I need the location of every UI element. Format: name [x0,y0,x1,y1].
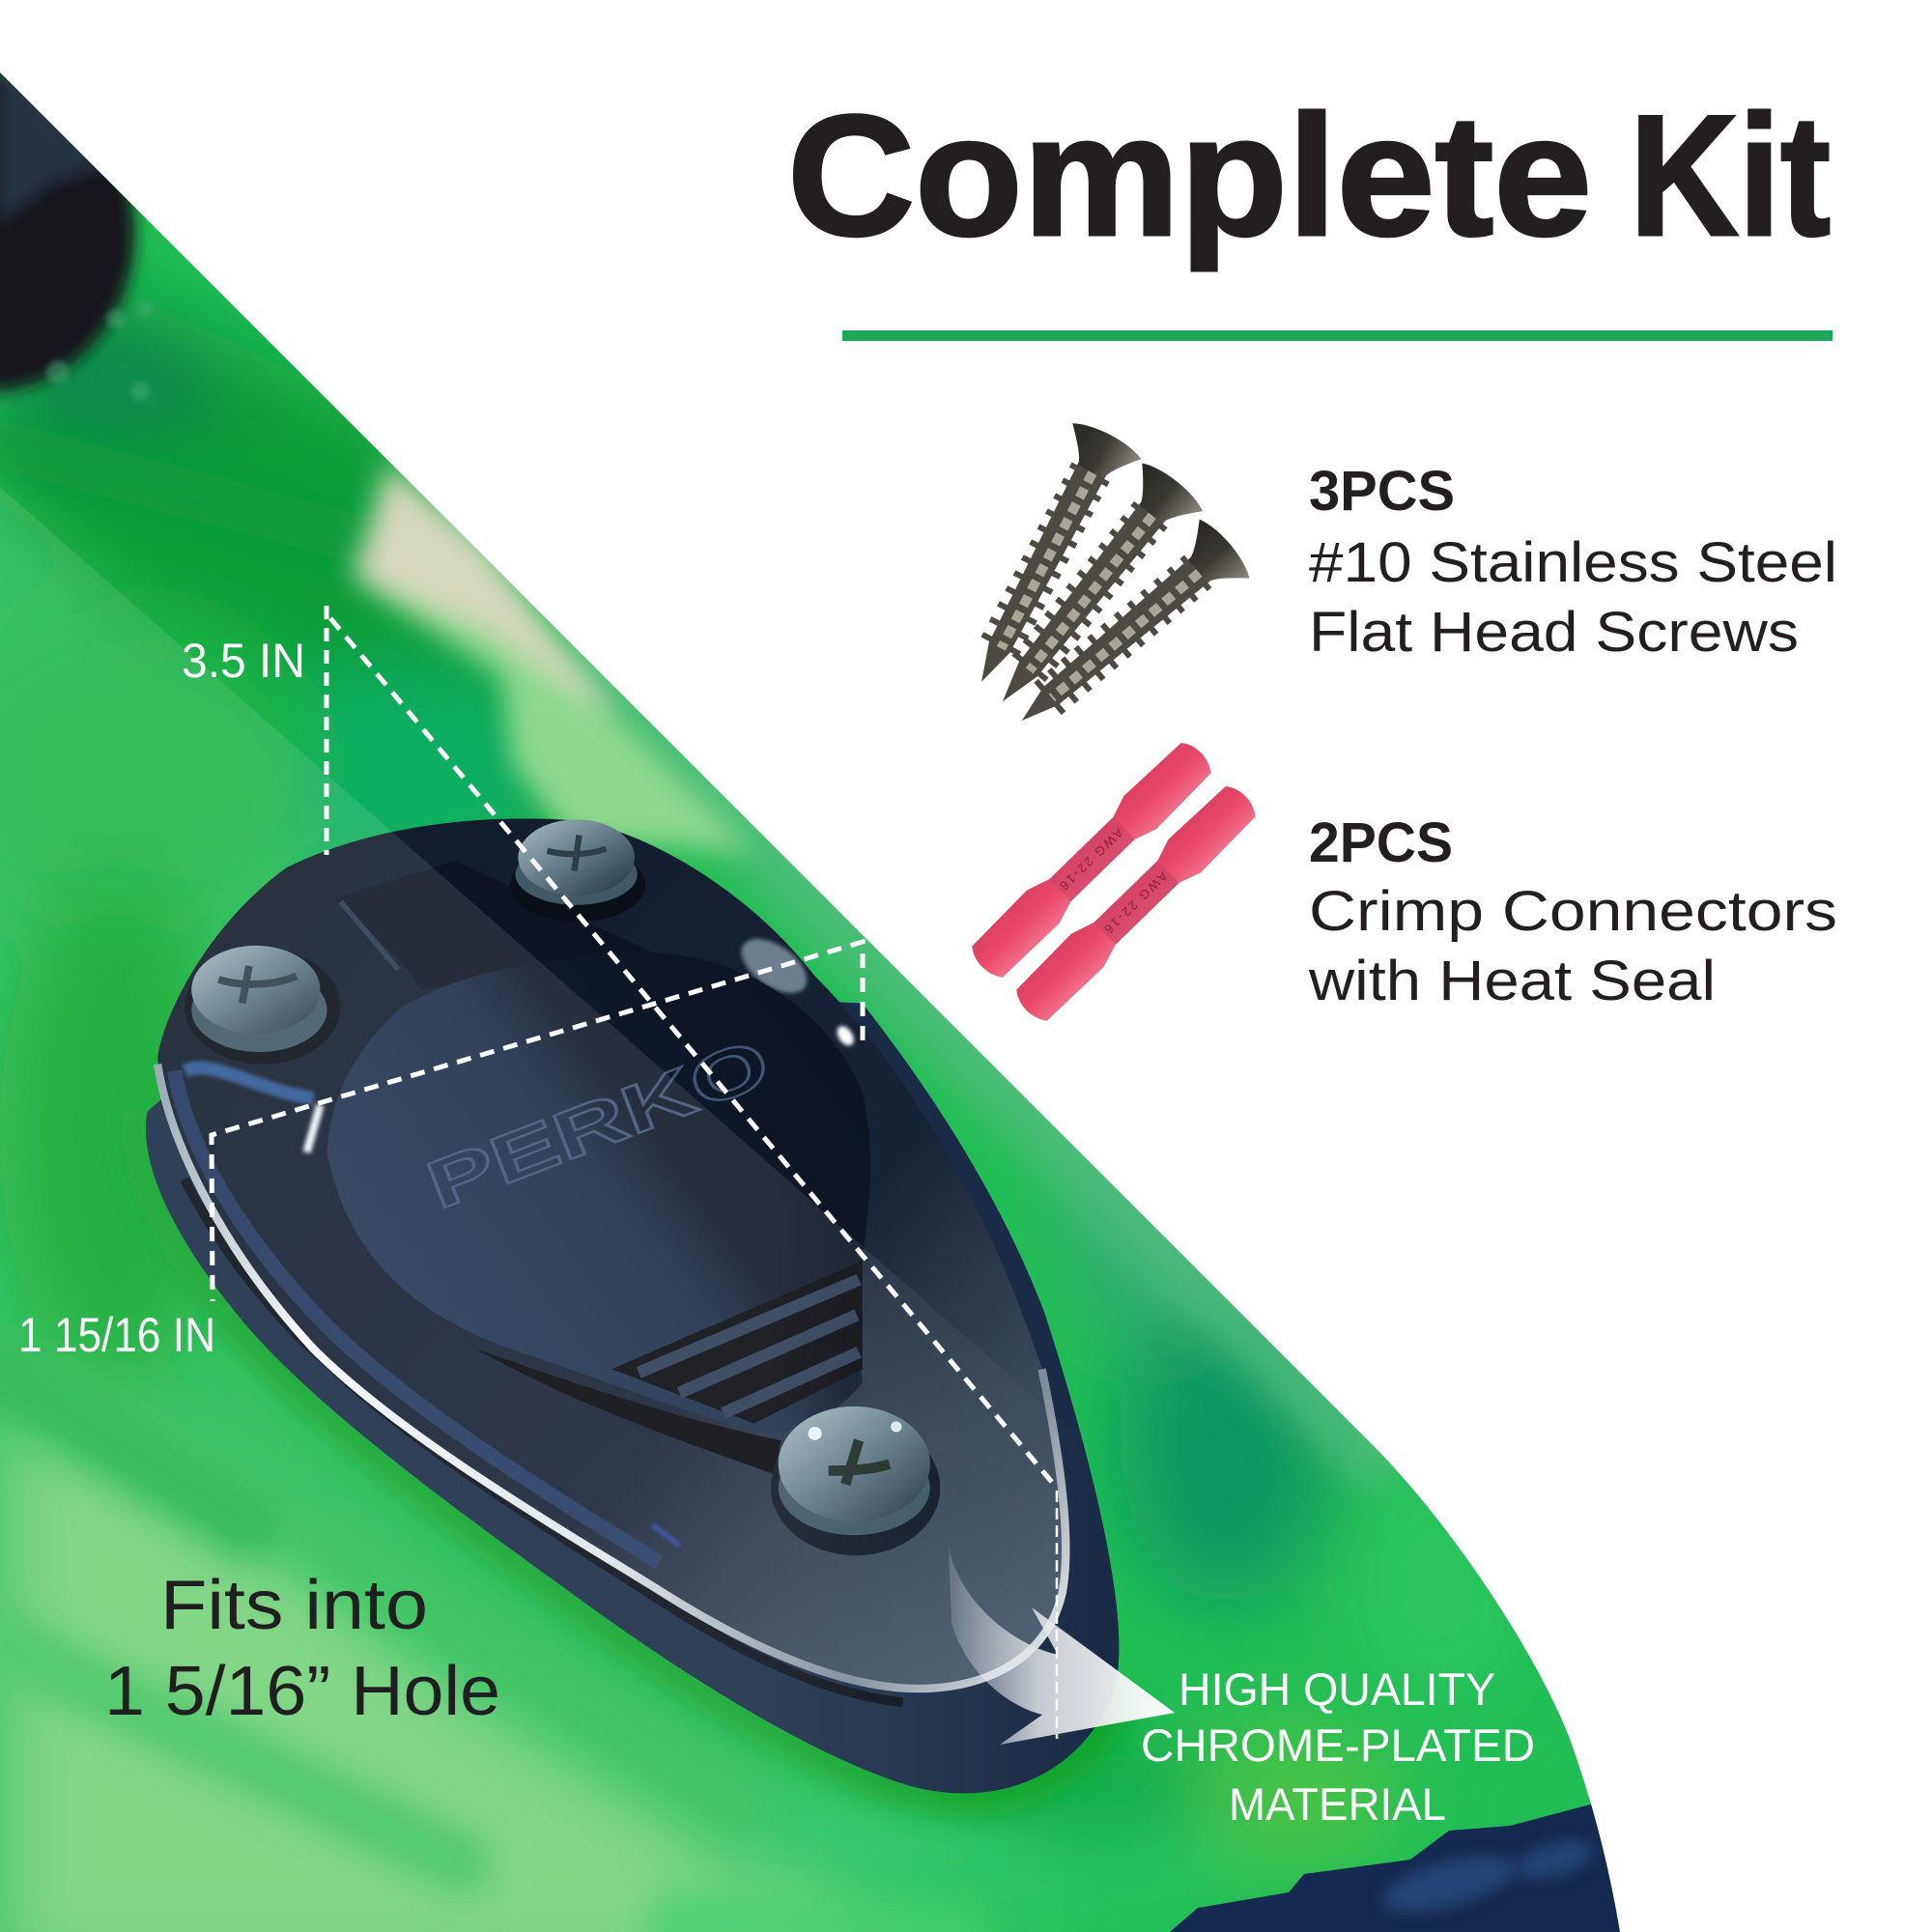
muted strip along the diagonal edge [599,676,1372,1444]
text block: screws: #10 Stainless Steel [1309,531,1837,594]
PERKO embossed logo: PERKO [416,1023,780,1223]
text: fits into hole [104,1567,500,1730]
mounting screw bottom [771,1406,940,1555]
text: fits into hole: 1 5/16” Hole [104,1653,500,1730]
hinge slot [334,861,652,989]
black shadow below cap [476,1349,781,1474]
rubber cap [327,952,870,1434]
connector 1: AWG 22-16 [1057,825,1126,893]
text block: connectors: Crimp Connectors [1309,880,1837,943]
screw 3 [997,515,1255,750]
connector mount [146,818,1119,1793]
blurred beige patch [351,464,753,850]
saturated halo around mount [174,1240,1138,1830]
text block: screws: 3PCS [1309,460,1455,523]
dark hose at bottom right [1170,1797,1642,1932]
chrome plate [157,818,1066,1689]
text: chrome-plated material callout: CHROME-PLATED [1141,1719,1535,1771]
text block: screws: Flat Head Screws [1309,601,1799,664]
mounting screw left [185,946,341,1065]
icon: three stainless steel screws [948,417,1255,750]
white callout arrow [949,1491,1175,1745]
plate reflections [185,928,857,1546]
dimension line: 1 15/16 in width [212,942,863,1301]
dark gap below chrome [185,1179,903,1702]
connector 1 [966,736,1217,983]
chrome edge highlight [157,1065,1065,1689]
text: chrome-plated material callout: HIGH QUALITY [1179,1663,1495,1715]
lower-left translucent overlay [0,487,1642,1932]
top-left dark object [0,58,135,391]
rubber gasket [146,976,1119,1793]
screw 2 [973,458,1208,725]
text block: connectors [1308,811,1837,1012]
label: 1 15/16 IN: 1 15/16 IN [18,1308,215,1362]
text: chrome-plated material callout: MATERIAL [1229,1778,1446,1830]
icon: two red crimp connectors [966,736,1262,1027]
dimension line: 3.5 in height [327,606,1055,1486]
title: Complete [787,79,1592,271]
text block: connectors: 2PCS [1309,811,1453,874]
connector 2: AWG 22-16 [1101,868,1171,936]
label: 3.5 IN: 3.5 IN [182,634,305,688]
screw 1 [948,417,1145,699]
text block: connectors: with Heat Seal [1308,950,1716,1012]
title: Kit [1630,79,1831,271]
connector 2 [1010,780,1262,1027]
chevron grip [611,1261,863,1423]
text: fits into hole: Fits into [160,1567,428,1644]
text block: screws [1309,460,1837,664]
mounting screw top [510,819,645,922]
text: chrome-plated material callout [1141,1663,1535,1830]
title underline [842,330,1833,341]
